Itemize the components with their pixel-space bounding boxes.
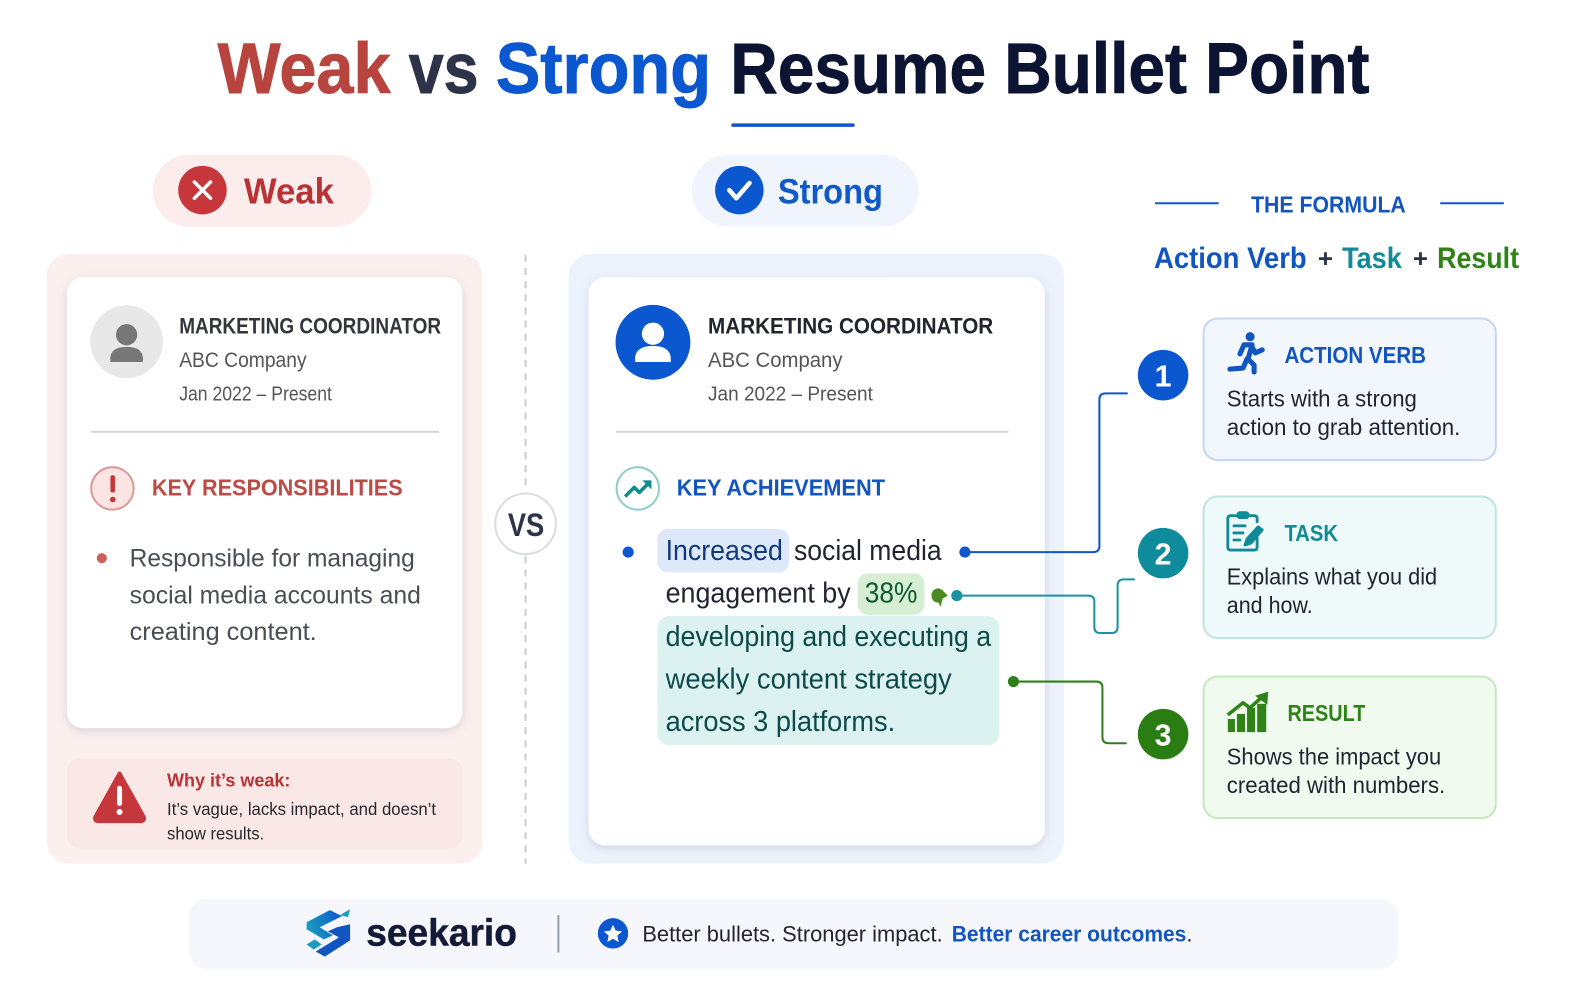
panel: weak — [47, 254, 483, 864]
strong resume card — [589, 277, 1045, 845]
strong bullet text: 38% — [865, 577, 917, 609]
job details: ABC Company — [179, 349, 307, 372]
tagline: Better career outcomes — [952, 921, 1186, 946]
card: task — [1204, 497, 1496, 638]
formula equation: Task — [1342, 242, 1402, 275]
formula equation — [1154, 242, 1519, 275]
card: result: created with numbers. — [1227, 772, 1445, 798]
strong badge: Strong — [778, 172, 883, 211]
icon: trend up — [617, 467, 659, 510]
weak bullet text: creating content. — [130, 618, 317, 646]
weak bullet text — [97, 544, 421, 646]
step 1 number: 1 — [1155, 360, 1172, 393]
weak badge — [153, 155, 371, 227]
weak badge: Weak — [244, 170, 335, 211]
callout: why it's weak — [67, 758, 462, 848]
step 2 number: 2 — [1155, 538, 1172, 571]
icon: grey avatar — [90, 305, 163, 378]
card: action verb: action to grab attention. — [1227, 414, 1460, 440]
connector 1 — [959, 393, 1128, 558]
card: action verb — [1204, 319, 1496, 460]
tagline: Better bullets. Stronger impact. — [642, 921, 943, 946]
icon: seekario logo — [307, 909, 350, 957]
job details: ABC Company — [708, 349, 843, 372]
title: Resume Bullet Point — [730, 29, 1369, 109]
step 3 number — [1138, 709, 1188, 759]
job details: MARKETING COORDINATOR — [708, 314, 993, 339]
weak bullet text: social media accounts and — [130, 582, 421, 610]
icon: star badge — [598, 918, 628, 949]
job details: Jan 2022 – Present — [179, 383, 332, 405]
title: Strong — [496, 29, 711, 109]
callout: why it's weak: It’s vague, lacks impact, and doesn’t — [167, 799, 436, 819]
weak bullet text: Responsible for managing — [130, 544, 415, 572]
connector 3 — [1008, 676, 1127, 743]
icon: growth chart — [1228, 692, 1268, 732]
card: result: RESULT — [1287, 700, 1365, 726]
icon: warning triangle — [95, 774, 144, 821]
weak resume card — [67, 277, 462, 728]
card: task: and how. — [1227, 592, 1313, 618]
card: result — [1204, 677, 1496, 818]
footer bar — [189, 899, 1398, 969]
job details: MARKETING COORDINATOR — [179, 314, 441, 339]
job details: Jan 2022 – Present — [708, 383, 873, 405]
formula equation: + — [1318, 245, 1333, 273]
connector 2 — [932, 579, 1135, 633]
icon: blue avatar — [616, 305, 690, 380]
vs badge: VS — [508, 507, 544, 543]
step 2 number — [1138, 528, 1188, 578]
formula equation: + — [1413, 245, 1428, 273]
step 3 number: 3 — [1155, 719, 1172, 752]
step 1 number — [1138, 350, 1188, 400]
title — [218, 29, 1369, 109]
icon: clipboard — [1228, 513, 1262, 550]
card: action verb: Starts with a strong — [1227, 386, 1417, 412]
title: Weak — [218, 29, 391, 109]
formula heading: THE FORMULA — [1251, 191, 1406, 217]
card: task: TASK — [1284, 520, 1338, 546]
strong bullet text: engagement by — [666, 577, 851, 609]
tagline — [642, 921, 1193, 946]
strong bullet text: Increased — [666, 534, 783, 566]
card: action verb: ACTION VERB — [1284, 342, 1426, 368]
footer bar: seekario — [366, 911, 517, 954]
tagline: . — [1186, 921, 1193, 946]
strong bullet text: across 3 platforms. — [666, 705, 895, 737]
job details — [179, 314, 441, 405]
callout: why it's weak: Why it’s weak: — [167, 771, 290, 791]
strong bullet text — [623, 529, 999, 745]
strong bullet text: social media — [794, 534, 942, 566]
formula equation: Action Verb — [1154, 242, 1307, 275]
heading: key responsibilities: KEY RESPONSIBILITIES — [152, 474, 403, 500]
formula equation: Result — [1437, 242, 1519, 275]
icon: alert — [91, 467, 134, 510]
vs badge — [495, 493, 556, 554]
icon: runner — [1230, 332, 1262, 372]
panel: strong — [569, 254, 1064, 864]
heading: key achievement: KEY ACHIEVEMENT — [677, 474, 885, 500]
card: task: Explains what you did — [1227, 563, 1437, 589]
strong bullet text: developing and executing a — [666, 620, 991, 652]
title: vs — [409, 29, 479, 109]
strong badge — [692, 155, 918, 227]
callout: why it's weak: show results. — [167, 823, 264, 843]
card: result: Shows the impact you — [1227, 743, 1441, 769]
job details — [708, 314, 993, 405]
strong bullet text: weekly content strategy — [665, 663, 953, 695]
